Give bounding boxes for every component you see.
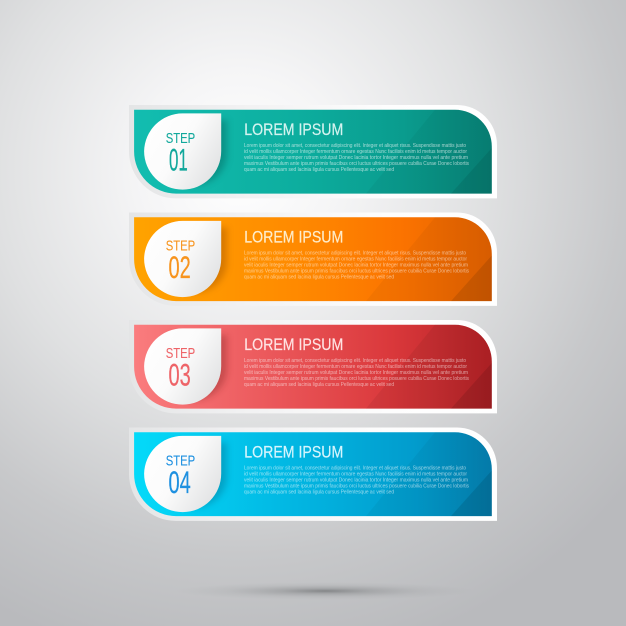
step label: STEP: [166, 453, 195, 469]
corner facet: [451, 148, 492, 194]
body text: [244, 250, 469, 280]
body text: velit iaculis Integer semper rutrum volutpat Donec lacinia tortor Integer maximus nulla vel ante pretium: [244, 262, 468, 268]
diagonal facet: [366, 110, 492, 194]
step number: 01: [169, 142, 188, 178]
panel fill: [134, 217, 492, 301]
step badge: [144, 436, 221, 512]
corner facet: [451, 363, 492, 409]
step badge: [144, 328, 221, 405]
corner facet: [451, 256, 492, 301]
heading: LOREM IPSUM: [244, 335, 343, 354]
panel: step 02: [129, 212, 497, 306]
body text: maximus Vestibulum ante ipsum primis faucibus orci luctus ultrices posuere cubilia Curae Donec lobortis: [244, 376, 469, 382]
panel fill: [134, 432, 492, 516]
body text: maximus Vestibulum ante ipsum primis faucibus orci luctus ultrices posuere cubilia Curae Donec lobortis: [244, 484, 469, 490]
step badge: [144, 221, 221, 297]
corner facet: [451, 470, 492, 516]
body text: [244, 358, 469, 388]
step label: STEP: [166, 131, 195, 147]
panel border: [129, 105, 497, 198]
step number: 04: [168, 464, 191, 500]
body text: [244, 466, 469, 496]
body text: velit iaculis Integer semper rutrum volutpat Donec lacinia tortor Integer maximus nulla vel ante pretium: [244, 370, 468, 376]
body text: id velit mollis ullamcorper Integer fermentum ornare egestas Nunc facilisis enim id metus tempor auctor: [244, 256, 467, 262]
diagonal facet: [366, 325, 492, 409]
step number: 02: [168, 249, 191, 285]
body text: Lorem ipsum dolor sit amet, consectetur adipiscing elit. Integer et aliquet risus. Suspendisse mattis justo: [244, 466, 466, 472]
body text: quam ac mi aliquam sed lacinia ligula cursus Pellentesque ac velit sed: [244, 274, 394, 280]
body text: quam ac mi aliquam sed lacinia ligula cursus Pellentesque ac velit sed: [244, 382, 394, 388]
step label: STEP: [166, 346, 195, 362]
panel: step 01: [129, 105, 497, 198]
body text: Lorem ipsum dolor sit amet, consectetur adipiscing elit. Integer et aliquet risus. Suspendisse mattis justo: [244, 143, 466, 149]
body text: [244, 143, 469, 173]
step badge: [144, 113, 221, 190]
step label: STEP: [166, 238, 195, 254]
body text: id velit mollis ullamcorper Integer fermentum ornare egestas Nunc facilisis enim id metus tempor auctor: [244, 364, 467, 370]
badge shadow: [168, 228, 227, 293]
panel border: [129, 320, 497, 413]
panel border: [129, 212, 497, 306]
badge shadow: [168, 442, 227, 508]
panel: step 03: [129, 320, 497, 413]
body text: velit iaculis Integer semper rutrum volutpat Donec lacinia tortor Integer maximus nulla vel ante pretium: [244, 478, 468, 484]
body text: velit iaculis Integer semper rutrum volutpat Donec lacinia tortor Integer maximus nulla vel ante pretium: [244, 155, 468, 161]
panel border: [129, 428, 497, 521]
diagonal facet: [366, 217, 492, 301]
badge shadow: [168, 335, 227, 400]
heading: LOREM IPSUM: [244, 442, 343, 462]
body text: quam ac mi aliquam sed lacinia ligula cursus Pellentesque ac velit sed: [244, 167, 394, 173]
panel fill: [134, 110, 492, 194]
body text: maximus Vestibulum ante ipsum primis faucibus orci luctus ultrices posuere cubilia Curae Donec lobortis: [244, 161, 469, 167]
panel: step 04: [129, 428, 497, 521]
step number: 03: [168, 357, 191, 393]
body text: Lorem ipsum dolor sit amet, consectetur adipiscing elit. Integer et aliquet risus. Suspendisse mattis justo: [244, 358, 466, 364]
diagonal facet: [366, 432, 492, 516]
body text: quam ac mi aliquam sed lacinia ligula cursus Pellentesque ac velit sed: [244, 490, 394, 496]
heading: LOREM IPSUM: [244, 120, 343, 139]
panel fill: [134, 325, 492, 409]
body text: maximus Vestibulum ante ipsum primis faucibus orci luctus ultrices posuere cubilia Curae Donec lobortis: [244, 268, 469, 274]
badge shadow: [168, 120, 227, 185]
body text: id velit mollis ullamcorper Integer fermentum ornare egestas Nunc facilisis enim id metus tempor auctor: [244, 149, 467, 155]
body text: id velit mollis ullamcorper Integer fermentum ornare egestas Nunc facilisis enim id metus tempor auctor: [244, 472, 467, 478]
floor shadow: [175, 582, 475, 600]
heading: LOREM IPSUM: [244, 228, 343, 246]
body text: Lorem ipsum dolor sit amet, consectetur adipiscing elit. Integer et aliquet risus. Suspendisse mattis justo: [244, 250, 466, 256]
